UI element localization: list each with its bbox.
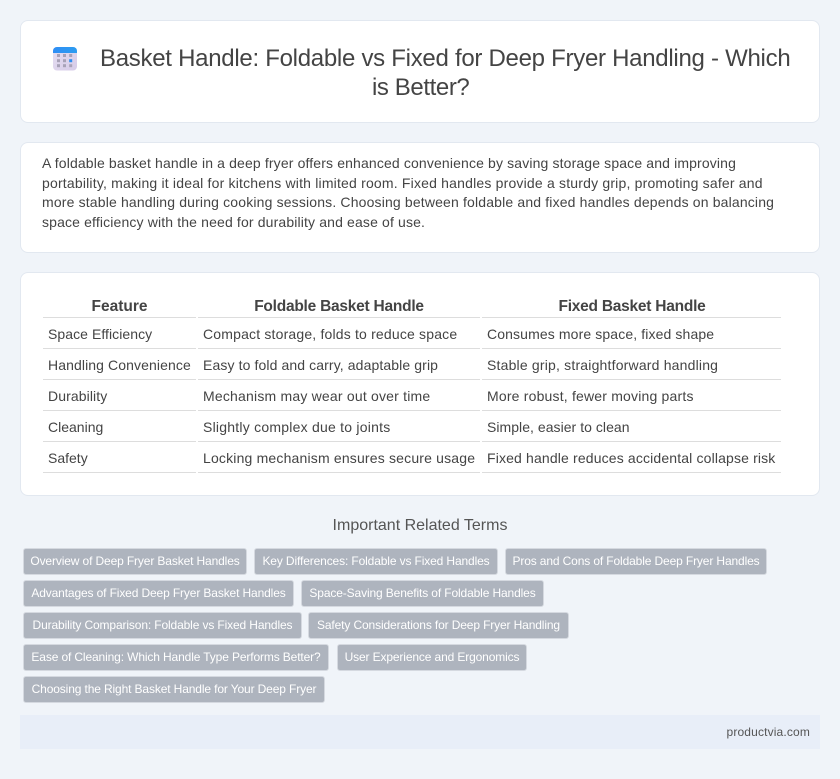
comparison table: Durability (48, 388, 107, 404)
description text: A foldable basket handle in a deep fryer offers enhanced convenience by saving storage space and improving (42, 155, 736, 171)
description text: portability, making it ideal for kitchens with limited room. Fixed handles provide a sturdy grip, promoting safer and (42, 174, 763, 190)
title: Basket Handle: Foldable vs Fixed for Deep Fryer Handling - Which (100, 45, 790, 72)
footer source text: productvia.com (727, 725, 810, 739)
comparison table: Consumes more space, fixed shape (487, 326, 714, 342)
description text: space efficiency with the need for durability and ease of use. (42, 214, 425, 230)
comparison table: Locking mechanism ensures secure usage (203, 450, 475, 466)
related term tags: Advantages of Fixed Deep Fryer Basket Handles (31, 586, 286, 600)
related term tags: Durability Comparison: Foldable vs Fixed Handles (33, 618, 292, 632)
heading: important related terms: Important Related Terms (333, 517, 507, 534)
footer bar (20, 715, 820, 749)
description text (42, 155, 774, 230)
related term tags: Pros and Cons of Foldable Deep Fryer Handles (512, 554, 760, 568)
comparison table: Cleaning (48, 419, 103, 435)
panel: description card (20, 142, 820, 253)
comparison table: Space Efficiency (48, 326, 152, 342)
comparison table: Safety (48, 450, 88, 466)
comparison table: Simple, easier to clean (487, 419, 630, 435)
related term tags: User Experience and Ergonomics (345, 650, 519, 664)
description text: more stable handling during cooking sessions. Choosing between foldable and fixed handles depends on balancing (42, 194, 774, 210)
comparison table: Handling Convenience (48, 357, 191, 373)
comparison table: Compact storage, folds to reduce space (203, 326, 457, 342)
related term tags: Key Differences: Foldable vs Fixed Handles (262, 554, 490, 568)
related term tags: Choosing the Right Basket Handle for Your Deep Fryer (32, 682, 316, 696)
comparison table (43, 298, 781, 473)
comparison table: Feature (92, 298, 148, 315)
related term tags: Space-Saving Benefits of Foldable Handles (309, 586, 536, 600)
related term tags: Safety Considerations for Deep Fryer Handling (317, 618, 560, 632)
comparison table: Slightly complex due to joints (203, 419, 390, 435)
related term tags: Overview of Deep Fryer Basket Handles (30, 554, 240, 568)
panel: title card (20, 20, 820, 123)
comparison table: Fixed Basket Handle (558, 298, 706, 315)
panel: comparison table card (20, 272, 820, 496)
comparison table: Stable grip, straightforward handling (487, 357, 718, 373)
comparison table: Mechanism may wear out over time (203, 388, 430, 404)
comparison table: Fixed handle reduces accidental collapse risk (487, 450, 775, 466)
comparison table: More robust, fewer moving parts (487, 388, 694, 404)
comparison table: Easy to fold and carry, adaptable grip (203, 357, 438, 373)
icon: calendar grid (53, 47, 77, 70)
title (100, 45, 790, 101)
related term tags: Ease of Cleaning: Which Handle Type Performs Better? (31, 650, 321, 664)
title: is Better? (372, 74, 469, 101)
related term tags (23, 548, 767, 703)
comparison table: Foldable Basket Handle (254, 298, 424, 315)
